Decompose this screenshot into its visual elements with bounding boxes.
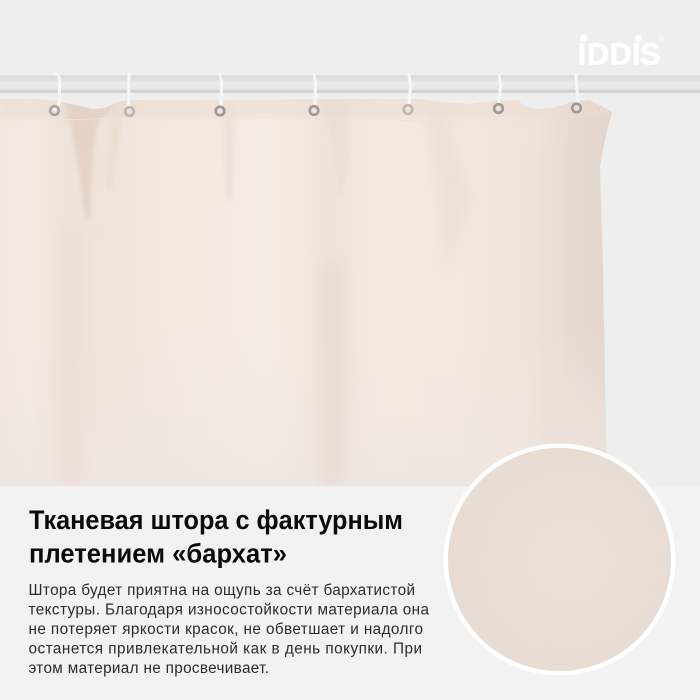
registered mark: ® xyxy=(659,34,665,43)
body text: останется привлекательной как в день покупки. При xyxy=(28,640,422,658)
body text: не потеряет яркости красок, не обветшает и надолго xyxy=(28,621,423,638)
fabric texture circle xyxy=(444,444,676,676)
ring 7 xyxy=(572,75,581,112)
body text: текстуры. Благодаря износостойкости материала она xyxy=(28,602,429,618)
heading xyxy=(29,505,403,568)
ring 1 xyxy=(50,74,60,115)
ring 2 xyxy=(125,74,134,116)
ring 6 xyxy=(494,75,503,113)
curtain xyxy=(0,97,612,486)
curtain rings and grommets xyxy=(50,74,581,116)
ring 3 xyxy=(216,74,224,115)
heading: Тканевая штора с фактурным xyxy=(29,505,403,535)
ring 5 xyxy=(404,75,412,114)
heading: плетением «бархат» xyxy=(29,538,287,568)
ring 4 xyxy=(310,74,318,115)
curtain rod xyxy=(0,76,700,93)
body text: Штора будет приятна на ощупь за счёт бархатистой xyxy=(28,582,415,599)
body text: этом материал не просвечивает. xyxy=(28,660,269,677)
body text xyxy=(28,582,429,677)
logo: iDDIS: IDDIS xyxy=(578,36,661,72)
bottom text panel xyxy=(0,486,700,700)
